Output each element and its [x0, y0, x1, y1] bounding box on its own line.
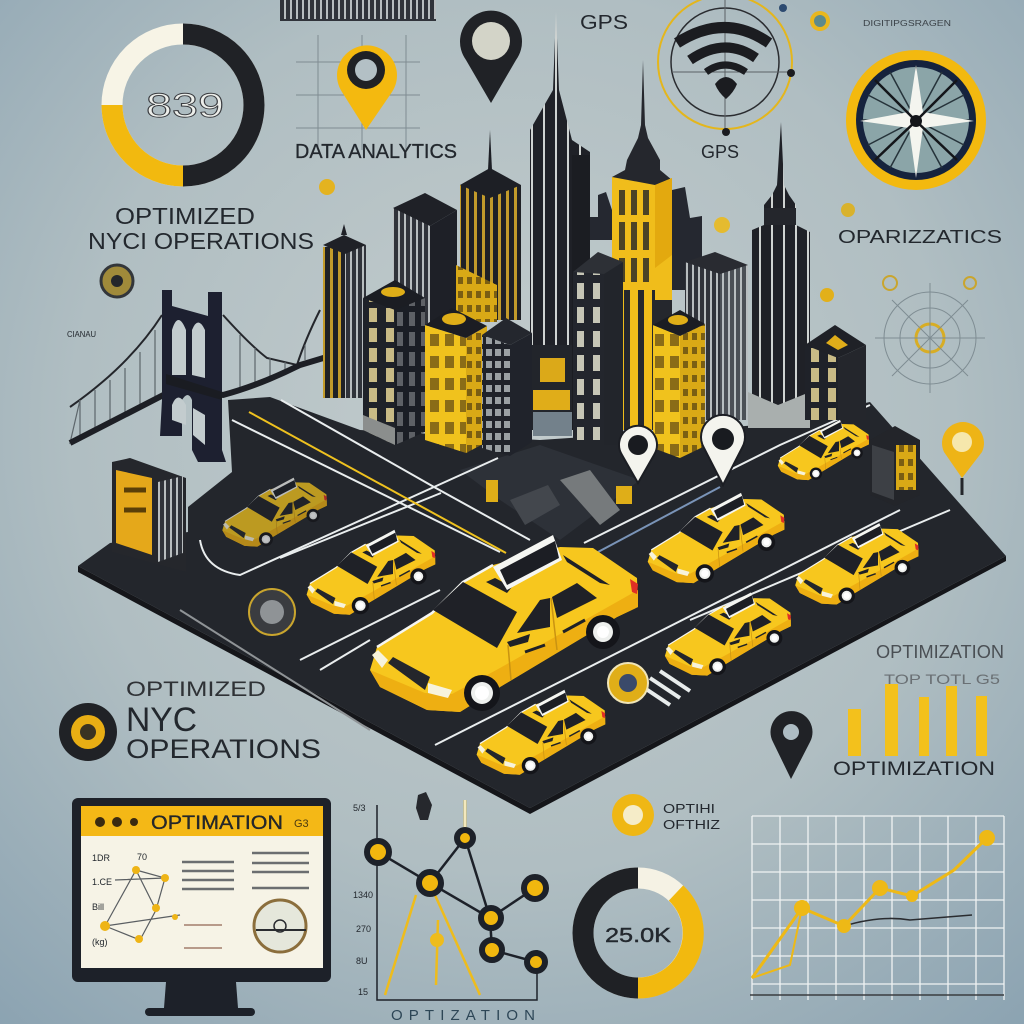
monitor heading: OPTIMATION — [151, 813, 283, 834]
taxi: far right — [778, 420, 869, 480]
chart caption: OPTIMIZATION — [833, 759, 995, 780]
small decorative icons — [101, 179, 976, 302]
label with yellow target — [612, 794, 720, 836]
building: black with yellow windows — [363, 280, 425, 445]
axis labels: (kg) — [92, 937, 108, 947]
gear icon on street — [249, 589, 295, 635]
chart subtitle: TOP TOTL G5 — [884, 671, 1000, 687]
tower: yellow-black — [456, 130, 521, 322]
icon: GPS wifi signal — [658, 0, 795, 136]
top barcode graphic — [280, 0, 436, 21]
panel: bar chart right — [833, 642, 1004, 780]
axis labels: 70 — [137, 852, 147, 862]
building: far right street block — [870, 426, 920, 506]
pin: yellow right — [942, 422, 984, 495]
panel: monitor: G3 — [294, 818, 309, 830]
title block: optimized NYC operations upper — [88, 203, 314, 254]
text lines — [182, 853, 309, 889]
heading: optimized NYC operations lower: OPTIMIZED — [126, 678, 266, 701]
axis numbers — [353, 803, 373, 997]
building: dark right-center — [573, 252, 623, 445]
axis labels: 1.CE — [92, 877, 112, 887]
network diagram — [105, 870, 180, 940]
heading: optimized NYC operations lower: NYC — [126, 701, 197, 739]
building: left slim — [323, 224, 366, 398]
label: data analytics: DATA ANALYTICS — [295, 141, 457, 163]
label with yellow target: OFTHIZ — [663, 817, 720, 832]
street clutter — [460, 445, 640, 540]
network diagram nodes — [100, 866, 178, 943]
icon: target badge — [59, 703, 117, 761]
building: yellow front right — [653, 310, 705, 458]
line chart panel — [750, 816, 1004, 1000]
building: gray right — [685, 252, 748, 420]
label: optimization right: OPARIZZATICS — [838, 227, 1002, 247]
pin: dark lower right — [770, 711, 813, 779]
tower: empire style — [748, 122, 810, 428]
chart title: OPTIMIZATION — [876, 642, 1004, 662]
bars — [848, 684, 987, 756]
label with yellow target: OPTIHI — [663, 801, 715, 816]
axis labels — [92, 852, 147, 947]
panel: monitor — [72, 798, 331, 1016]
road markings — [180, 400, 950, 745]
storefront: center — [532, 345, 572, 436]
axis labels: Bill — [92, 902, 104, 912]
axis numbers: 1340 — [353, 890, 373, 900]
building: yellow front — [425, 308, 487, 453]
axis numbers: 8U — [356, 956, 368, 966]
yellow target icon on street — [608, 663, 648, 703]
label: GPS top: GPS — [580, 12, 628, 34]
tower: yellow crowned — [612, 60, 672, 430]
bridge — [70, 290, 360, 462]
small icon above network chart — [416, 792, 432, 820]
icon: small top-right badge — [779, 4, 830, 31]
small bridge caption: CIANAU — [67, 330, 96, 339]
donut chart: bottom — [583, 878, 693, 988]
taxi: faded rear left — [222, 478, 327, 547]
axis numbers: 270 — [356, 924, 371, 934]
tower: tall black — [530, 12, 590, 430]
taxi: lower right — [665, 592, 791, 676]
network chart caption: OPTIZATION — [391, 1007, 535, 1024]
pin: yellow with grid — [296, 35, 420, 150]
heading: optimized NYC operations lower: OPERATIONS — [126, 734, 321, 764]
road platform — [78, 397, 1006, 814]
axis numbers: 5/3 — [353, 803, 366, 813]
map pins on street — [619, 415, 745, 485]
taxi: front bottom — [477, 690, 605, 775]
taxi: left — [307, 530, 435, 615]
taxi: right — [795, 523, 918, 605]
skyline buildings — [323, 12, 866, 458]
title block: optimized NYC operations upper: NYCI OPERATIONS — [88, 228, 314, 254]
building: low right with yellow top — [805, 325, 866, 420]
billboard building left — [112, 458, 186, 572]
title block: optimized NYC operations upper: OPTIMIZED — [115, 203, 255, 229]
window dots — [95, 817, 138, 827]
silhouette: behind — [590, 187, 702, 290]
building: gray tower — [393, 193, 457, 330]
donut chart: top left — [112, 34, 254, 176]
gauge — [254, 900, 306, 952]
label: GPS lower: GPS — [701, 142, 739, 162]
small caption top right: DIGITIPGSRAGEN — [863, 19, 951, 28]
icon: compass — [846, 50, 986, 190]
axis labels: 1DR — [92, 853, 111, 863]
pin: dark top — [460, 11, 522, 103]
donut value: 25.0K — [605, 925, 672, 947]
trend line — [752, 838, 987, 978]
axis numbers: 15 — [358, 987, 368, 997]
taxi: upper right — [648, 493, 784, 583]
heading: optimized NYC operations lower — [126, 678, 321, 764]
data points — [794, 830, 995, 933]
network line chart — [353, 792, 546, 1024]
taxi: main large — [370, 535, 638, 712]
radar graphic right — [875, 283, 985, 393]
donut value: 839 — [146, 87, 224, 125]
building: dark front — [482, 318, 532, 456]
